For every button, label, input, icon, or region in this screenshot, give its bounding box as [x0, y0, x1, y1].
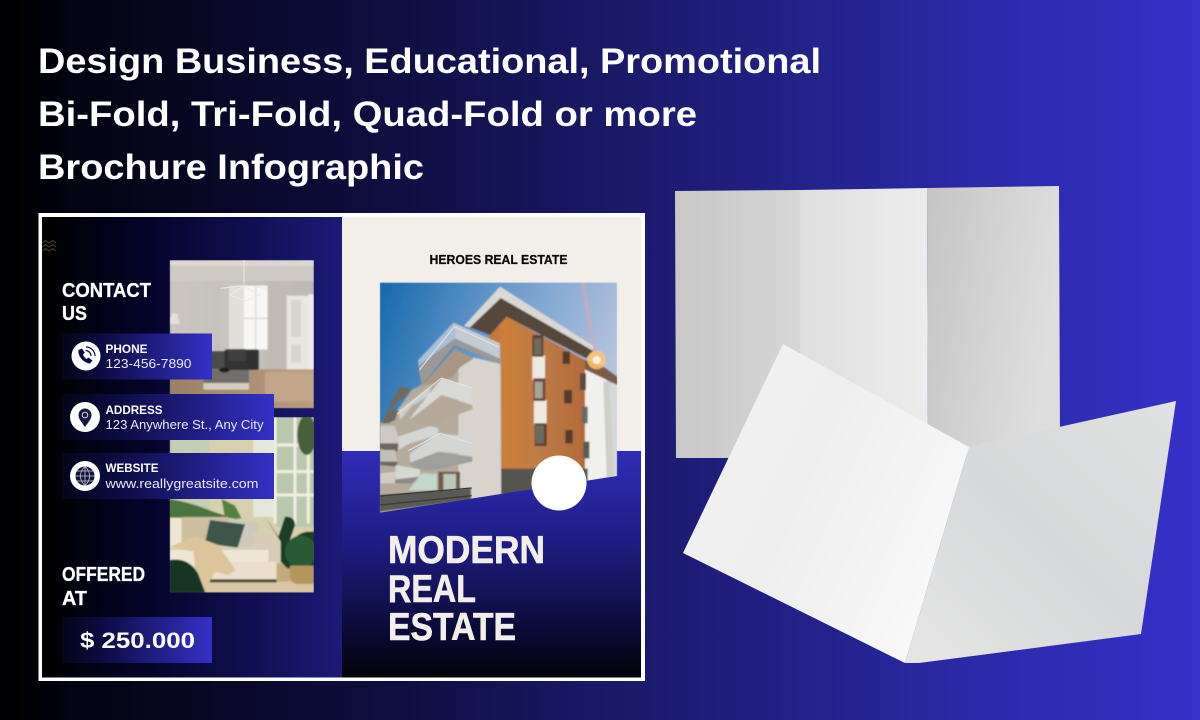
address label: ADDRESS [106, 403, 162, 417]
phone label: PHONE [106, 342, 148, 356]
left wing with balconies [380, 323, 501, 513]
photo: apartment building [380, 282, 617, 516]
bar: address [62, 394, 274, 440]
decorative white circle [532, 456, 586, 510]
brochure poster [38, 213, 645, 681]
poster white frame [38, 213, 645, 681]
heading: offered at [62, 564, 145, 610]
heading: contact us [62, 280, 151, 325]
cover title: MODERN [388, 529, 545, 572]
cover title: ESTATE [388, 606, 516, 649]
title [38, 42, 821, 187]
price tag [62, 617, 212, 663]
bar: phone [62, 334, 212, 380]
website url: www.reallygreatsite.com [104, 476, 259, 491]
heading: contact us: CONTACT [62, 280, 151, 302]
heading: contact us: US [62, 303, 87, 325]
panel: cover [342, 217, 641, 678]
title: Bi-Fold, Tri-Fold, Quad-Fold or more [38, 95, 697, 134]
icon: location pin [70, 402, 100, 432]
cover title [388, 529, 545, 649]
title: Brochure Infographic [38, 148, 424, 187]
photo: sunroom with sofa [170, 415, 317, 593]
title: Design Business, Educational, Promotional [38, 42, 821, 81]
blank tri-fold brochure mockup [675, 186, 1060, 458]
panel: contact and offer [42, 217, 342, 678]
right fold [905, 401, 1176, 663]
address text: 123 Anywhere St., Any City [106, 417, 264, 432]
decorative chevrons [42, 240, 56, 251]
icon: phone [72, 342, 100, 370]
bar: website [62, 453, 274, 499]
heading: offered at: OFFERED [62, 564, 145, 586]
blank bi-fold brochure mockup [683, 344, 1176, 663]
cover title: REAL [388, 568, 476, 611]
price tag: $ 250.000 [80, 628, 195, 653]
photo: living room with chandelier [170, 260, 314, 408]
company name: HEROES REAL ESTATE [430, 252, 568, 267]
icon: globe [70, 461, 100, 491]
left fold [683, 344, 969, 663]
phone number: 123-456-7890 [106, 356, 192, 371]
heading: offered at: AT [62, 588, 87, 610]
website label: WEBSITE [106, 461, 158, 475]
